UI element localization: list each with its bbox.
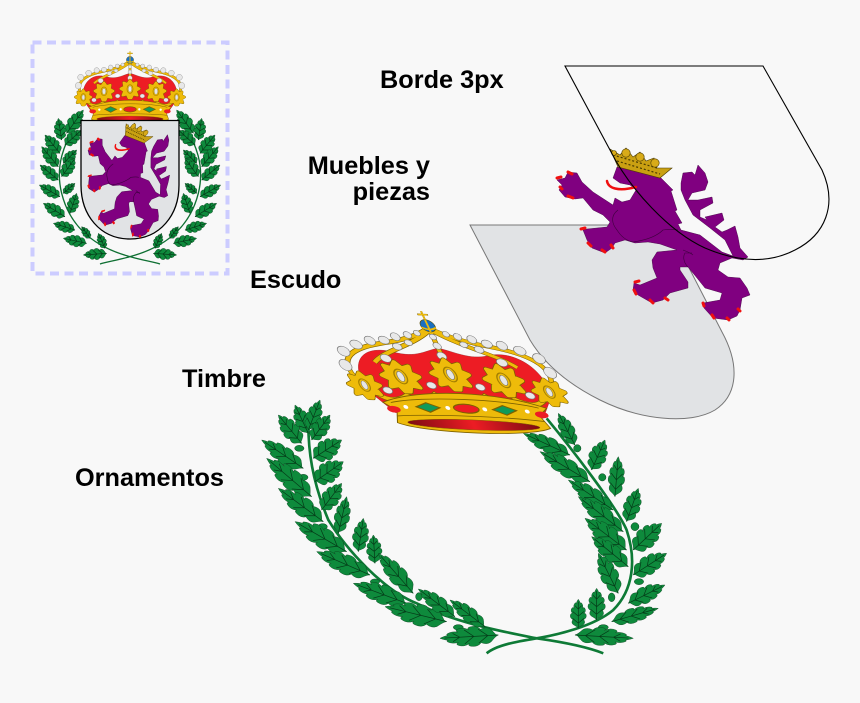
exploded ornaments wreath (257, 397, 672, 653)
thumbnail shield (81, 120, 179, 239)
wreath stems (308, 418, 632, 653)
exploded lion (muebles y piezas) (557, 148, 750, 320)
left branch leaves (257, 397, 499, 648)
label: Muebles y piezas: piezas (353, 178, 430, 206)
exploded crown (timbre) (313, 307, 586, 437)
dashed frame around complete coat of arms (32, 42, 228, 274)
label: Borde 3px: Borde 3px (380, 66, 504, 94)
thumbnail ornaments wreath (36, 106, 224, 264)
exploded shield border outline (565, 66, 829, 260)
label: Ornamentos: Ornamentos (75, 464, 224, 492)
acorns (295, 445, 644, 630)
complete coat of arms thumbnail (36, 51, 224, 264)
label: Muebles y piezas: Muebles y (308, 152, 430, 180)
label: Escudo: Escudo (250, 266, 341, 294)
thumbnail crown (75, 51, 185, 124)
thumbnail lion (51, 123, 199, 237)
label: Muebles y piezas (308, 152, 430, 206)
exploded shield fill (470, 225, 734, 419)
label: Timbre: Timbre (182, 365, 266, 393)
right branch leaves (520, 410, 672, 647)
